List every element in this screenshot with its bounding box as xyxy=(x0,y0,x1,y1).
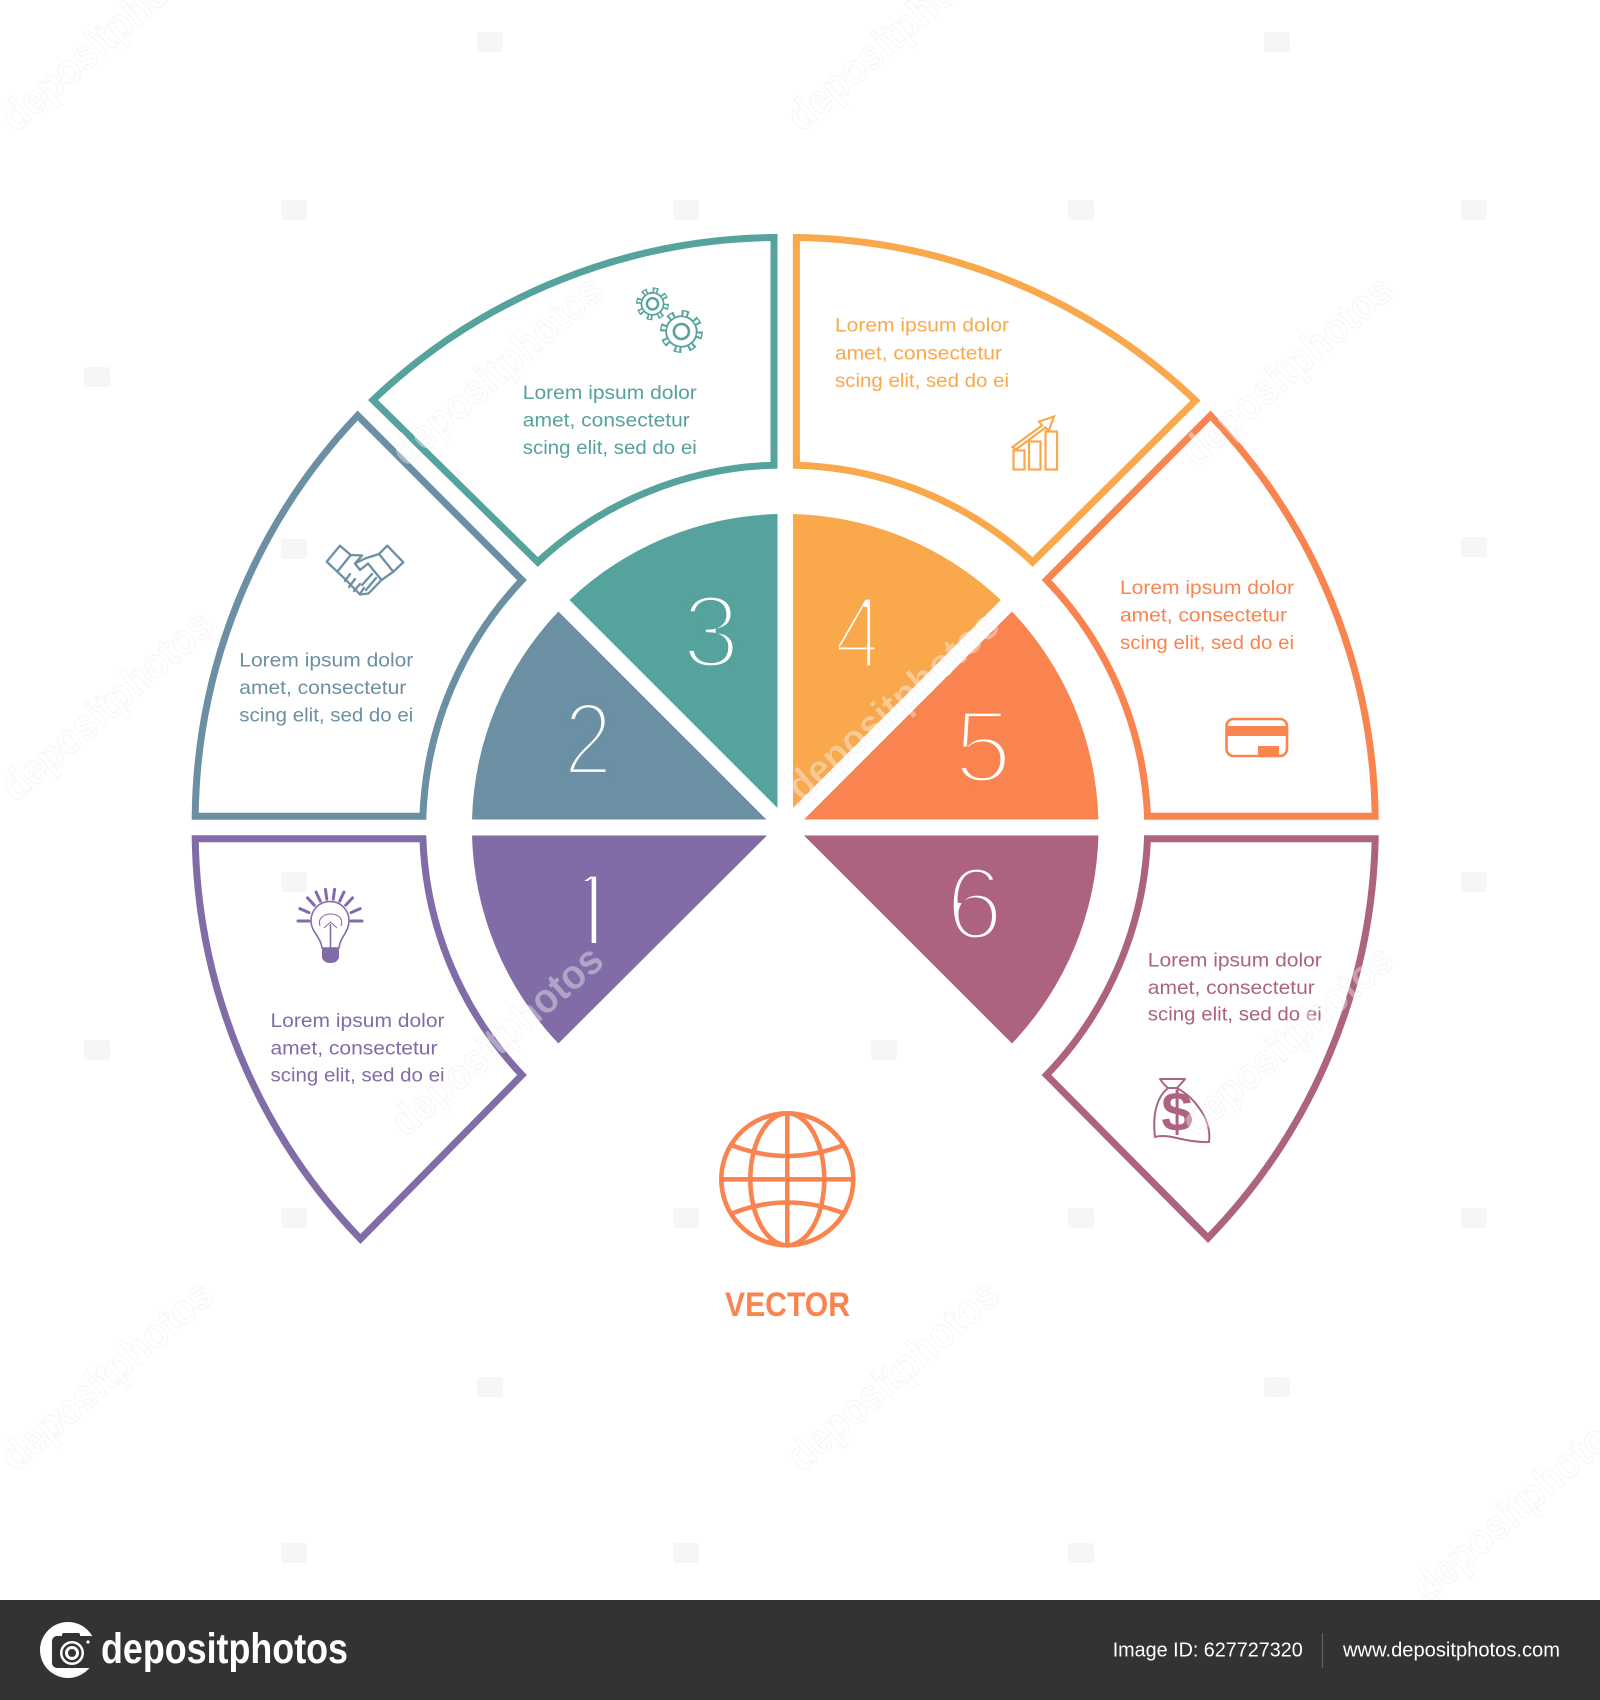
text 6: scing elit, sed do ei xyxy=(1148,1004,1322,1026)
text 1: amet, consectetur xyxy=(270,1038,438,1060)
icon: money bag: $ xyxy=(1161,1080,1193,1143)
wedge 2: slate blue xyxy=(472,612,766,820)
icon: handshake xyxy=(327,546,403,594)
text 1: scing elit, sed do ei xyxy=(270,1064,444,1086)
text 1: Lorem ipsum dolor xyxy=(270,1010,445,1032)
outline 6 xyxy=(1046,839,1375,1238)
image id: Image ID: 627727320 xyxy=(1113,1640,1303,1662)
watermark overlay: depositphotos xyxy=(1171,935,1402,1145)
text 4: scing elit, sed do ei xyxy=(835,370,1009,392)
wedge 5: orange xyxy=(804,612,1098,820)
panel 3: teal outline segment xyxy=(373,238,774,562)
watermark overlay: depositphotos xyxy=(777,1270,1008,1480)
text 5: amet, consectetur xyxy=(1120,604,1288,626)
panel 5: orange outline segment xyxy=(1046,416,1375,816)
text 2: Lorem ipsum dolor xyxy=(239,650,414,672)
wedge 1: purple: 1 xyxy=(561,851,623,974)
wedge 2: slate blue: 2 xyxy=(564,682,612,797)
text 4: amet, consectetur xyxy=(835,342,1003,364)
text 6: amet, consectetur xyxy=(1148,977,1315,999)
wedge 4: amber xyxy=(793,514,1001,808)
wedge 5: orange: 5 xyxy=(954,689,1012,804)
wedge 1: purple xyxy=(472,836,767,1044)
icon: credit card xyxy=(1226,719,1287,756)
panel 2: slate blue outline segment xyxy=(195,416,522,816)
outline 4 xyxy=(796,238,1196,562)
text 3: scing elit, sed do ei xyxy=(523,437,697,459)
text 3: amet, consectetur xyxy=(523,410,690,432)
wedge 3: teal xyxy=(570,514,778,808)
outline 3 xyxy=(373,238,774,562)
text 3: Lorem ipsum dolor xyxy=(523,382,697,404)
icon: globe xyxy=(721,1113,853,1245)
wedge 3: teal: 3 xyxy=(682,574,740,689)
watermark overlay: depositphotos xyxy=(777,600,1008,810)
panel 1: purple outline segment xyxy=(195,839,522,1239)
wedge 4: amber: 4 xyxy=(835,575,883,691)
icon: light bulb xyxy=(298,889,362,963)
text 6: Lorem ipsum dolor xyxy=(1148,950,1322,972)
icon: money bag xyxy=(1154,1079,1209,1143)
logo: camera badge xyxy=(40,1622,96,1678)
website: www.depositphotos.com xyxy=(1342,1640,1560,1662)
watermark overlay: depositphotos xyxy=(381,265,612,475)
footer bar xyxy=(0,1600,1600,1700)
icon: gears xyxy=(639,290,699,350)
label: VECTOR: VECTOR xyxy=(725,1286,850,1324)
watermark overlay: depositphotos xyxy=(1171,265,1402,475)
wedge 6: plum: 6 xyxy=(946,846,1003,961)
watermark overlay: depositphotos xyxy=(381,935,612,1145)
text 5: scing elit, sed do ei xyxy=(1120,632,1294,654)
outline 2 xyxy=(195,416,522,816)
logo wordmark: depositphotos xyxy=(101,1625,348,1673)
panel 6: plum outline segment xyxy=(1046,839,1375,1238)
outline 1 xyxy=(195,839,522,1239)
panel 4: amber outline segment xyxy=(796,238,1196,562)
text 2: amet, consectetur xyxy=(239,677,407,699)
wedge 6: plum xyxy=(804,836,1098,1044)
icon: growth chart xyxy=(1012,416,1057,470)
text 5: Lorem ipsum dolor xyxy=(1120,577,1295,599)
text 2: scing elit, sed do ei xyxy=(239,704,413,726)
text 4: Lorem ipsum dolor xyxy=(835,315,1010,337)
outline 5 xyxy=(1046,416,1375,816)
